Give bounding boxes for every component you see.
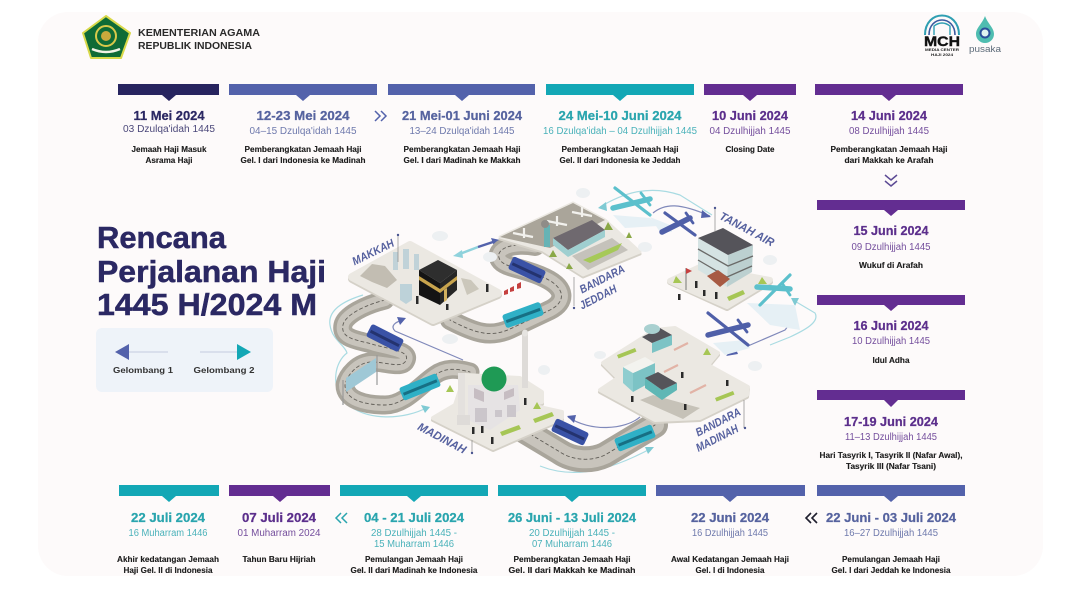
bus: left teal [399,373,441,401]
label: Bandara Jeddah [573,263,627,312]
logo: MCH Media Center Haji [924,16,960,57]
description [240,145,366,165]
bar [656,485,805,502]
description [132,145,207,165]
card: 16 Juni 2024 [817,295,965,365]
pilgrims [416,284,488,310]
description [117,555,219,575]
bar [118,84,219,101]
description: Hari Tasyrik I, Tasyrik II (Nafar Awal), [820,451,962,460]
date: 22 Juli 2024 [131,510,206,525]
date: 04 - 21 Juli 2024 [364,510,465,525]
platform: Madinah airport [600,324,748,422]
logo: MCH Media Center Haji: MEDIA CENTER [925,47,959,52]
bottom crop mask [0,576,1080,592]
description: Pemberangkatan Jemaah Haji [830,145,948,154]
bus: bottom teal [614,424,656,452]
logo: Pusaka [969,16,1002,55]
annex building [645,372,677,400]
logo: MCH Media Center Haji: MCH [924,34,960,49]
description: Pemberangkatan Jemaah Haji [244,145,362,154]
description: Gel. II dari Makkah ke Madinah [508,566,636,575]
description: Asrama Haji [146,156,192,165]
card: 07 Juli 2024 [229,485,330,564]
bar [817,295,965,311]
hijri date: 16 Dzulqa'idah – 04 Dzulhijjah 1445 [543,126,697,137]
description: Jemaah Haji Masuk [132,145,207,154]
title: Rencana [97,220,227,255]
description [350,555,478,575]
platform: Jeddah airport [500,203,640,277]
platform: Makkah [352,245,498,322]
trees and people [549,222,632,269]
description: Tahun Baru Hijriah [242,555,316,564]
description: Pemulangan Jemaah Haji [842,555,940,564]
bar [817,485,965,502]
bus: left blue [366,324,404,352]
description: Gel. I di Indonesia [696,566,765,575]
description [830,145,948,165]
control tower [642,324,672,353]
card: 11 Mei 2024 [118,84,219,165]
Kaaba [419,260,457,305]
legend label: Gelombang 2: Gelombang 2 [194,366,255,375]
description: Akhir kedatangan Jemaah [117,555,219,564]
hijri date: 16 Muharram 1446 [128,528,208,539]
title: Perjalanan Haji [97,254,326,289]
terminal [553,220,605,257]
hijri date [529,528,615,550]
arrow: Gelombang 2 [200,344,251,360]
description: Idul Adha [872,356,910,365]
clouds [432,188,777,375]
bar [817,200,965,216]
card: 22 Juni 2024 [656,485,805,575]
date: 16 Juni 2024 [854,318,929,333]
label: Bandara Madinah: BANDARA [694,406,743,439]
apron [500,203,605,248]
gardens, flag and people [673,276,767,301]
gardens [446,385,554,436]
description: Gel. I dari Madinah ke Makkah [404,156,521,165]
platform: Tanah Air [670,228,770,308]
mountains [360,264,397,288]
description: Gel. I dari Jeddah ke Indonesia [832,566,951,575]
description: Gel. II dari Indonesia ke Jeddah [560,156,681,165]
hijri date: 28 Dzulhijjah 1445 - [371,528,457,539]
label: Bandara Jeddah: BANDARA [578,263,627,296]
card: 10 Juni 2024 [704,84,796,154]
bus: top blue [508,256,546,284]
flags [504,282,521,295]
gardens [617,348,734,402]
hijri date: 16–27 Dzulhijjah 1445 [844,528,938,539]
card: 17-19 Juni 2024 [817,390,965,471]
hijri date: 10 Dzulhijjah 1445 [852,336,930,347]
description [508,555,636,575]
date: 24 Mei-10 Juni 2024 [558,108,682,123]
description: Haji Gel. II di Indonesia [124,566,213,575]
arrowheads: teal [421,202,799,454]
hijri date: 13–24 Dzulqa'idah 1445 [410,126,515,137]
plane: blue top [662,213,695,235]
palm trees [461,278,479,295]
date: 15 Juni 2024 [854,223,929,238]
hijri date: 01 Muharram 2024 [238,528,321,539]
road: Jeddah to Makkah [450,245,561,334]
hijri date: 04–15 Dzulqa'idah 1445 [250,126,357,137]
teal route arcs [330,190,816,472]
hijri date [371,528,457,550]
header organisation name: REPUBLIK INDONESIA [138,40,252,52]
road sign [343,355,377,405]
description: Pemberangkatan Jemaah Haji [514,555,630,564]
chevrons: right column downward [885,175,897,186]
description: Tasyrik III (Nafar Tsani) [846,462,936,471]
bar [546,84,694,101]
date: 22 Juni - 03 Juli 2024 [826,510,957,525]
plane: blue right [708,313,748,345]
description [832,555,951,575]
mosque [468,385,520,430]
bar [704,84,796,101]
hijri date: 16 Dzulhijjah 1445 [692,528,768,539]
bar [498,485,646,502]
legend label: Gelombang 1: Gelombang 1 [113,366,174,375]
logo: Kementerian Agama emblem [83,16,130,58]
terminal [623,357,655,392]
bar [815,84,963,101]
hijri date: 03 Dzulqa'idah 1445 [123,124,215,135]
description: Pemberangkatan Jemaah Haji [404,145,520,154]
building [698,228,753,287]
hijri date: 15 Muharram 1446 [374,539,454,550]
entrance [707,270,730,287]
chevrons: bottom row dark [806,513,817,523]
bar [388,84,535,101]
logo: MCH Media Center Haji: HAJI 2024 [931,52,954,57]
bar [229,84,377,101]
card: 04 - 21 Juli 2024 [340,485,488,575]
date: 17-19 Juni 2024 [844,414,939,429]
bar [340,485,488,502]
title [97,220,326,322]
card: 22 Juni - 03 Juli 2024 [817,485,965,575]
date: 14 Juni 2024 [851,108,928,123]
double arrow: Makkah and Jeddah [453,238,500,258]
header organisation name: KEMENTERIAN AGAMA [138,27,260,39]
description: Gel. II dari Madinah ke Indonesia [350,566,478,575]
date: 11 Mei 2024 [134,108,205,123]
description: Pemberangkatan Jemaah Haji [562,145,678,154]
description: dari Makkah ke Arafah [844,156,934,165]
description [820,451,962,471]
chevrons: bottom row teal [336,513,347,523]
hijri date: 08 Dzulhijjah 1445 [849,126,929,137]
description: Pemulangan Jemaah Haji [365,555,463,564]
description: Wukuf di Arafah [859,261,923,270]
bar [229,485,330,502]
label: Bandara Madinah [694,400,746,455]
hijri date: 07 Muharram 1446 [532,539,612,550]
description: Awal Kedatangan Jemaah Haji [671,555,789,564]
card: 14 Juni 2024 [815,84,963,165]
label: Tanah Air: TANAH AIR [717,211,776,250]
card: 15 Juni 2024 [817,200,965,270]
fountain [400,284,412,304]
description [404,145,521,165]
pilgrims [472,398,526,444]
header organisation name [138,27,260,52]
arrowheads: blue [397,210,738,423]
hijri date: 09 Dzulhijjah 1445 [852,242,931,253]
logo: Pusaka: pusaka [969,44,1002,55]
road: Makkah to Madinah [343,300,470,405]
card: 24 Mei-10 Juni 2024 [543,84,697,165]
date: 22 Juni 2024 [691,510,770,525]
bar [119,485,219,502]
hijri date: 11–13 Dzulhijjah 1445 [845,432,937,443]
date: 26 Juni - 13 Juli 2024 [508,510,637,525]
card: 21 Mei-01 Juni 2024 [388,84,535,165]
arrow: Gelombang 1 [115,344,168,360]
parked planes [513,207,592,238]
date: 21 Mei-01 Juni 2024 [402,108,523,123]
bus: top teal [502,302,544,328]
front minaret [457,373,470,425]
bus: bottom blue [551,418,589,446]
control tower [541,220,550,247]
arrows: blue routes [393,206,789,428]
hijri date: 20 Dzulhijjah 1445 - [529,528,615,539]
people [631,372,728,410]
car park and garden [572,238,628,270]
card: 26 Juni - 13 Juli 2024 [498,485,646,575]
plane trails [613,215,800,355]
illustration: isometric Hajj route map [330,188,816,472]
dome [482,366,506,392]
legend [96,328,273,392]
title: 1445 H/2024 M [97,287,317,322]
description [560,145,681,165]
card: 22 Juli 2024 [117,485,219,575]
towers [393,249,419,270]
description: Closing Date [726,145,775,154]
plane: teal right [757,275,790,305]
label: Bandara Madinah: MADINAH [694,423,741,455]
parked planes [664,343,706,393]
date: 12-23 Mei 2024 [256,108,350,123]
label: Makkah: MAKKAH [351,237,397,268]
bar [817,390,965,407]
tall minaret [522,330,528,388]
card: 12-23 Mei 2024 [229,84,377,165]
description: Gel. I dari Indonesia ke Madinah [240,156,366,165]
platform: Madinah [433,330,562,450]
chevrons: top row forward [375,111,386,121]
date: 10 Juni 2024 [712,108,789,123]
date: 07 Juli 2024 [242,510,317,525]
hijri date: 04 Dzulhijjah 1445 [710,126,791,137]
label: Bandara Jeddah: JEDDAH [578,283,620,312]
label: Madinah: MADINAH [415,421,468,457]
road: Madinah to airport [520,425,655,459]
plane: teal top [613,188,650,215]
car park [640,395,700,419]
description [671,555,789,575]
